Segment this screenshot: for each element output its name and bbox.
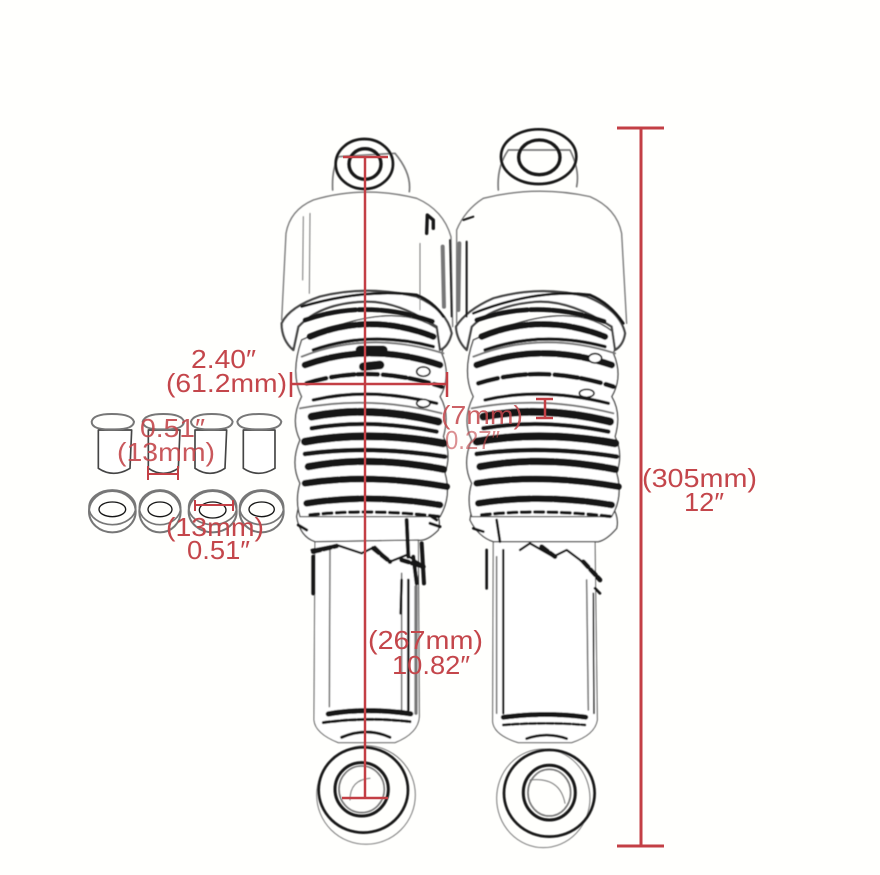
dimension marker: bushing 13mm	[148, 466, 178, 480]
dimension line: spring width 61.2mm	[291, 372, 447, 397]
dimension line: eye to eye 267mm	[342, 157, 388, 798]
label: 7mm	[441, 400, 523, 455]
flat washers	[89, 490, 284, 532]
label: washer size: (13mm)	[166, 512, 264, 542]
left shock absorber	[282, 139, 453, 844]
flanged bushings	[92, 414, 281, 473]
right shock absorber	[456, 129, 627, 848]
label: spring width: 2.40″	[191, 344, 256, 374]
label: spring width	[166, 344, 287, 398]
left coil spring	[282, 291, 452, 517]
label: 7mm: 0.27″	[445, 425, 500, 455]
label: bushing size: (13mm)	[117, 437, 215, 467]
dimension marker: 7mm	[536, 399, 553, 418]
label: overall height: (305mm)	[642, 463, 757, 493]
dimension marker: washer 13mm	[195, 500, 233, 511]
label: eye to eye length: 10.82″	[392, 650, 470, 680]
label: washer size: 0.51″	[187, 535, 250, 565]
label: washer size	[166, 512, 264, 565]
right top cap and eye	[457, 129, 627, 323]
dimension line: overall height 305mm	[617, 128, 664, 846]
label: overall height: 12″	[684, 487, 724, 517]
right coil spring	[456, 291, 625, 517]
left lower tube and eye	[297, 500, 440, 844]
label: 7mm: (7mm)	[441, 400, 523, 430]
bushings and washers	[89, 414, 284, 532]
label: eye to eye length: (267mm)	[368, 625, 483, 655]
label: spring width: (61.2mm)	[166, 368, 287, 398]
label: bushing size	[117, 413, 215, 467]
label: eye to eye length	[368, 625, 483, 680]
label: bushing size: 0.51″	[140, 413, 205, 443]
left top cap and eye	[282, 139, 453, 327]
right lower tube and eye	[470, 500, 617, 848]
label: overall height	[642, 463, 757, 517]
